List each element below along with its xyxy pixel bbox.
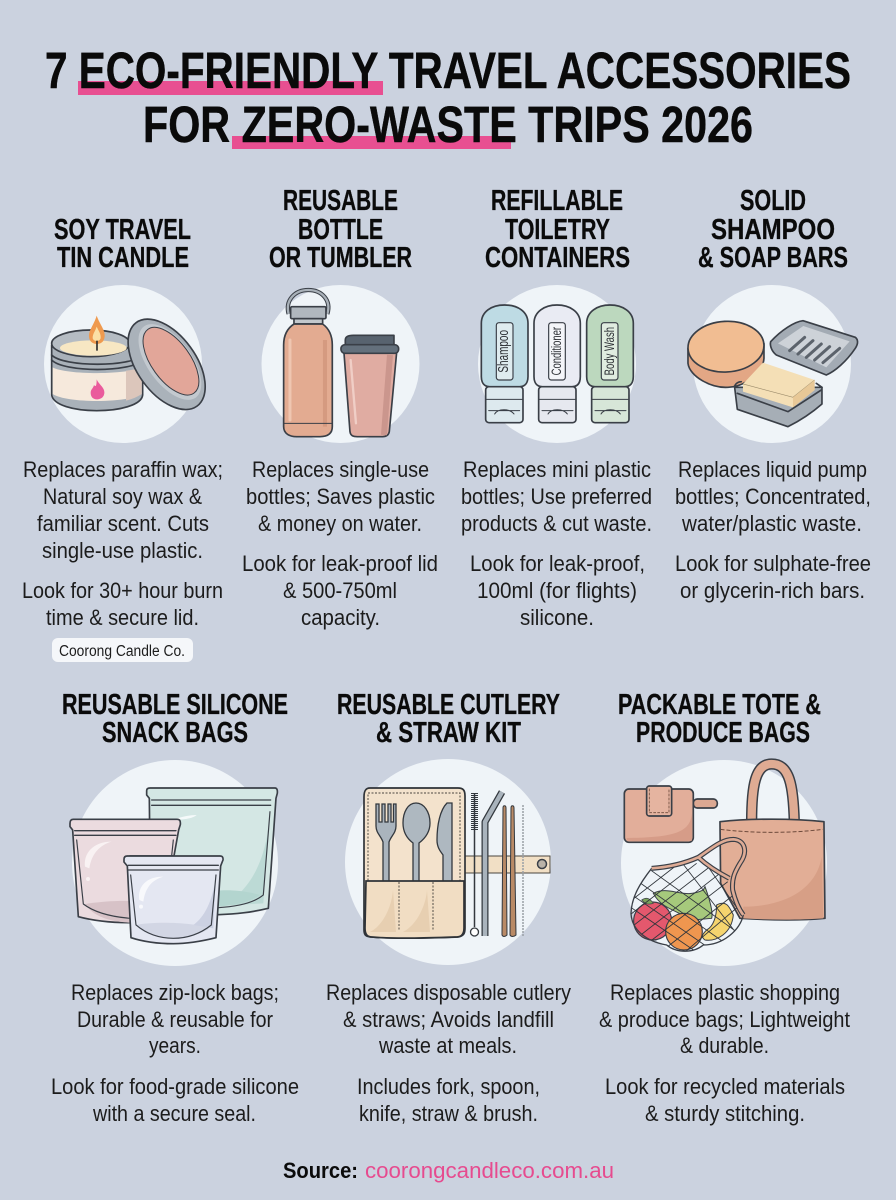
tube: conditioner	[534, 305, 580, 423]
text: cutlery description: & straws; Avoids landfill	[343, 1007, 554, 1032]
heading: silicone snack bags: REUSABLE SILICONE	[62, 689, 288, 721]
text: tote description: Replaces plastic shopping	[610, 980, 840, 1005]
text: bags description: Look for food-grade silicone	[51, 1074, 299, 1099]
panel: solid shampoo and soap bars	[675, 185, 871, 603]
text: cutlery description	[326, 980, 571, 1126]
text: bags description: Durable & reusable for	[77, 1007, 273, 1032]
text: tote description: & sturdy stitching.	[645, 1101, 805, 1126]
text: candle description: Replaces paraffin wax;	[23, 457, 223, 482]
bag: lavender	[124, 856, 223, 944]
icon: three toiletry tubes	[478, 285, 636, 443]
heading: silicone snack bags: SNACK BAGS	[102, 717, 248, 749]
strap	[460, 856, 550, 873]
text: soap description: Replaces liquid pump	[678, 457, 867, 482]
text: tote description: Look for recycled materials	[605, 1074, 845, 1099]
heading: cutlery and straw kit: REUSABLE CUTLERY	[337, 689, 560, 721]
chopsticks	[502, 806, 516, 936]
folded pouch	[624, 786, 717, 842]
heading: tote and produce bags: PRODUCE BAGS	[636, 717, 810, 749]
fruit	[634, 887, 733, 950]
tote bag	[720, 764, 825, 920]
panel: refillable toiletry containers	[461, 185, 652, 630]
pocket	[365, 881, 464, 938]
text: bags description: years.	[149, 1033, 201, 1058]
icon: snack bags	[70, 760, 278, 966]
text: candle description: single-use plastic.	[42, 538, 203, 563]
source line: coorongcandleco.com.au	[365, 1158, 614, 1183]
text: bags description: Replaces zip-lock bags;	[71, 980, 279, 1005]
tube: body wash	[587, 305, 633, 423]
tube: shampoo	[481, 305, 528, 423]
heading: solid shampoo: & SOAP BARS	[698, 242, 848, 274]
text: tote description: & produce bags; Lightweight	[599, 1007, 850, 1032]
icon: bottle and tumbler	[262, 285, 420, 443]
heading: soy travel tin candle: TIN CANDLE	[57, 242, 189, 274]
heading: silicone snack bags	[62, 689, 288, 749]
tube: shampoo: Shampoo	[496, 330, 512, 373]
text: soap description: water/plastic waste.	[681, 511, 862, 536]
heading: refillable toiletry containers: CONTAINERS	[485, 242, 630, 274]
text: soap description: bottles; Concentrated,	[675, 484, 871, 509]
panel: reusable cutlery and straw kit	[326, 689, 571, 1126]
text: toiletry description: Replaces mini plastic	[463, 457, 651, 482]
panel: reusable silicone snack bags	[51, 689, 299, 1126]
heading: refillable toiletry containers: TOILETRY	[505, 214, 610, 246]
metal straw	[485, 792, 502, 936]
panel: reusable bottle or tumbler	[242, 185, 438, 630]
text: bags description: with a secure seal.	[92, 1101, 256, 1126]
heading: reusable bottle: BOTTLE	[298, 214, 383, 246]
bag: pink	[70, 819, 180, 923]
heading: reusable bottle	[269, 185, 412, 274]
text: bottle description	[242, 457, 438, 630]
text: soap description	[675, 457, 871, 603]
text: tote description: & durable.	[680, 1033, 769, 1058]
heading: cutlery and straw kit: & STRAW KIT	[376, 717, 521, 749]
knife	[437, 803, 452, 882]
text: candle description: Look for 30+ hour burn	[22, 578, 223, 603]
text: bottle description: bottles; Saves plastic	[246, 484, 435, 509]
text: toiletry description: Look for leak-proof,	[470, 551, 645, 576]
heading: soy travel tin candle	[54, 214, 191, 274]
text: toiletry description: silicone.	[520, 605, 594, 630]
heading: solid shampoo: SOLID	[740, 185, 806, 217]
text: cutlery description: knife, straw & brush.	[359, 1101, 538, 1126]
net handle	[652, 839, 745, 915]
text: soap description: or glycerin-rich bars.	[680, 578, 865, 603]
heading: soy travel tin candle: SOY TRAVEL	[54, 214, 191, 246]
title	[45, 42, 851, 153]
brand badge: Coorong Candle Co.	[59, 643, 185, 660]
tube: conditioner: Conditioner	[549, 327, 564, 375]
text: toiletry description: 100ml (for flights)	[477, 578, 637, 603]
text: bottle description: & money on water.	[258, 511, 422, 536]
cleaning brush	[470, 793, 478, 936]
fork	[376, 804, 396, 882]
heading: reusable bottle: OR TUMBLER	[269, 242, 412, 274]
text: cutlery description: Includes fork, spoon,	[357, 1074, 540, 1099]
text: tote description	[599, 980, 850, 1126]
text: candle description	[22, 457, 223, 630]
source line: Source:	[283, 1158, 358, 1183]
text: bottle description: capacity.	[301, 605, 380, 630]
text: candle description: time & secure lid.	[46, 605, 199, 630]
tube: body wash: Body Wash	[602, 327, 617, 375]
text: bottle description: & 500-750ml	[283, 578, 397, 603]
heading: tote and produce bags: PACKABLE TOTE &	[618, 689, 821, 721]
panel: soy travel tin candle	[22, 214, 223, 662]
icon: soap bars and dishes	[687, 285, 858, 443]
text: toiletry description: products & cut waste.	[461, 511, 652, 536]
text: candle description: familiar scent. Cuts	[37, 511, 209, 536]
bag: green	[147, 788, 277, 915]
text: bags description	[51, 980, 299, 1126]
title: FOR ZERO-WASTE TRIPS 2026	[143, 96, 753, 153]
brand badge	[52, 638, 193, 662]
text: toiletry description: bottles; Use preferred	[461, 484, 652, 509]
panel: packable tote and produce bags	[599, 689, 850, 1126]
text: toiletry description	[461, 457, 652, 630]
text: cutlery description: Replaces disposable cutlery	[326, 980, 571, 1005]
fabric roll	[364, 788, 465, 938]
heading: refillable toiletry containers: REFILLABLE	[491, 185, 623, 217]
spoon	[403, 803, 430, 882]
text: soap description: Look for sulphate-free	[675, 551, 871, 576]
heading: reusable bottle: REUSABLE	[283, 185, 398, 217]
text: candle description: Natural soy wax &	[43, 484, 202, 509]
string net	[632, 863, 742, 951]
text: cutlery description: waste at meals.	[378, 1033, 517, 1058]
heading: refillable toiletry containers	[485, 185, 630, 274]
heading: cutlery and straw kit	[337, 689, 560, 749]
text: bottle description: Replaces single-use	[252, 457, 429, 482]
heading: solid shampoo	[698, 185, 848, 274]
icon: candle tin	[44, 285, 221, 443]
icon: cutlery roll and straws	[345, 759, 551, 965]
heading: solid shampoo: SHAMPOO	[711, 214, 835, 246]
text: bottle description: Look for leak-proof lid	[242, 551, 438, 576]
heading: tote and produce bags	[618, 689, 821, 749]
icon: tote, pouch and net bag	[620, 760, 827, 966]
